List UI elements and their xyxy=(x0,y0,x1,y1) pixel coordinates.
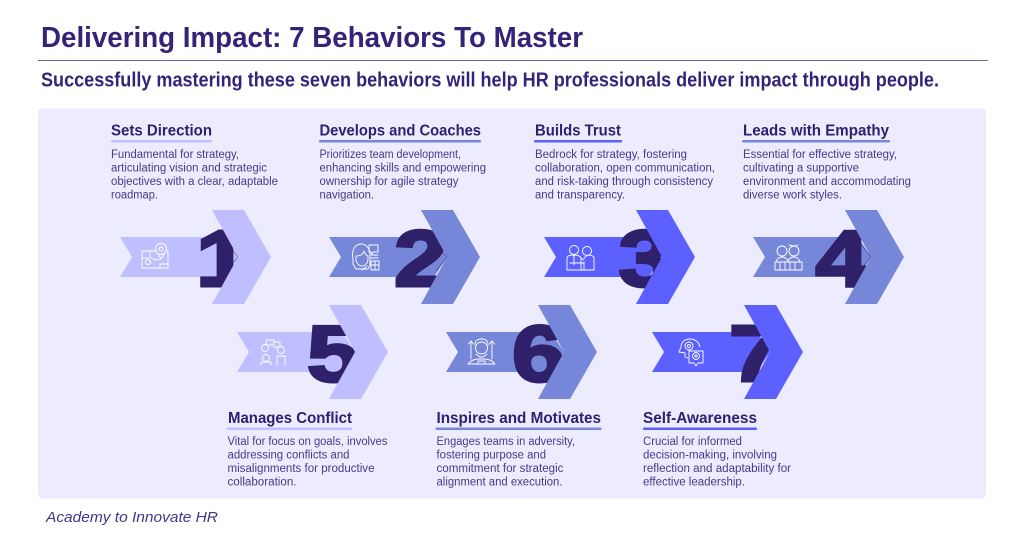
behavior text: Develops and Coaches xyxy=(319,122,486,202)
icon: head with gears xyxy=(679,339,703,366)
arrow 5 xyxy=(237,305,388,399)
behavior text: Self-Awareness: reflection and adaptability for xyxy=(643,463,791,475)
number 2: 2 xyxy=(394,214,447,303)
subtitle: Successfully mastering these seven behaviors will help HR professionals deliver impact through people. xyxy=(41,70,939,92)
behavior text: Develops and Coaches: Prioritizes team development, xyxy=(320,149,461,161)
behavior text: Inspires and Motivates: Engages teams in adversity, xyxy=(436,436,575,448)
behavior text: Sets Direction: roadmap. xyxy=(111,190,158,202)
icon: two people behind fence xyxy=(775,245,802,270)
behavior text: Manages Conflict: misalignments for productive xyxy=(228,463,374,475)
icon: map pin xyxy=(142,244,168,268)
arrow 3 xyxy=(544,210,695,304)
arrow 4 xyxy=(753,210,904,304)
behavior text: Self-Awareness: Crucial for informed xyxy=(643,436,742,448)
behavior text: Leads with Empathy: Essential for effective strategy, xyxy=(743,149,897,161)
behavior text: Inspires and Motivates: commitment for strategic xyxy=(436,463,564,475)
behavior text: Inspires and Motivates xyxy=(436,410,602,488)
icon: two people handshake xyxy=(567,246,594,270)
behavior text: Sets Direction: articulating vision and strategic xyxy=(111,162,267,174)
behavior text: Builds Trust: and transparency. xyxy=(535,190,625,202)
behavior text: Leads with Empathy: Leads with Empathy xyxy=(743,122,889,140)
behavior text: Manages Conflict xyxy=(227,410,388,488)
behavior text: Builds Trust xyxy=(534,122,715,202)
number 1: 1 xyxy=(196,214,249,303)
behavior text: Manages Conflict: Vital for focus on goals, involves xyxy=(228,436,388,448)
arrow 7 xyxy=(652,305,803,399)
behavior text: Develops and Coaches: ownership for agile strategy xyxy=(320,176,459,188)
behavior text: Builds Trust: Bedrock for strategy, fostering xyxy=(535,149,687,161)
behavior text: Develops and Coaches: Develops and Coaches xyxy=(320,122,481,140)
icon: motivating leader xyxy=(468,339,495,364)
behavior text: Inspires and Motivates: Inspires and Motivates xyxy=(436,410,601,427)
behavior text: Self-Awareness: Self-Awareness xyxy=(643,410,757,427)
behavior text: Inspires and Motivates: alignment and execution. xyxy=(436,476,562,488)
behavior text: Leads with Empathy: environment and accommodating xyxy=(743,176,911,188)
title: Delivering Impact: 7 Behaviors To Master xyxy=(41,22,583,54)
behavior text: Self-Awareness: decision-making, involving xyxy=(643,450,777,462)
number 7: 7 xyxy=(729,309,782,398)
behavior text: Develops and Coaches: enhancing skills and empowering xyxy=(320,162,486,174)
behavior text: Manages Conflict: collaboration. xyxy=(228,476,296,488)
number 5: 5 xyxy=(307,309,360,398)
behavior text: Self-Awareness: effective leadership. xyxy=(643,476,745,488)
behavior text: Builds Trust: Builds Trust xyxy=(535,122,621,140)
behavior text: Sets Direction xyxy=(111,122,278,202)
behavior text: Builds Trust: collaboration, open communication, xyxy=(535,162,715,174)
icon: coach with chat xyxy=(353,244,379,270)
behavior text: Manages Conflict: Manages Conflict xyxy=(228,410,352,427)
behavior text: Builds Trust: and risk-taking through consistency xyxy=(535,176,713,188)
icon: conflict discussion xyxy=(261,340,285,365)
behavior text: Leads with Empathy: diverse work styles. xyxy=(743,190,842,202)
behavior text: Inspires and Motivates: fostering purpose and xyxy=(436,450,546,462)
behavior text: Develops and Coaches: navigation. xyxy=(320,190,374,202)
arrow 1 xyxy=(120,210,271,304)
panel: behaviors xyxy=(38,108,986,498)
behavior text: Manages Conflict: addressing conflicts and xyxy=(228,450,350,462)
behavior text: Leads with Empathy xyxy=(742,122,911,202)
number 4: 4 xyxy=(816,214,869,303)
behavior text: Leads with Empathy: cultivating a supportive xyxy=(743,162,859,174)
number 3: 3 xyxy=(618,214,672,303)
behavior text: Sets Direction: Fundamental for strategy, xyxy=(111,149,239,161)
behavior text: Self-Awareness xyxy=(643,410,791,488)
behavior text: Sets Direction: Sets Direction xyxy=(111,122,212,140)
footer credit: Academy to Innovate HR xyxy=(45,509,218,526)
behavior text: Sets Direction: objectives with a clear, adaptable xyxy=(111,176,278,188)
arrow 6 xyxy=(446,305,597,399)
arrow 2 xyxy=(329,210,480,304)
number 6: 6 xyxy=(512,309,565,398)
